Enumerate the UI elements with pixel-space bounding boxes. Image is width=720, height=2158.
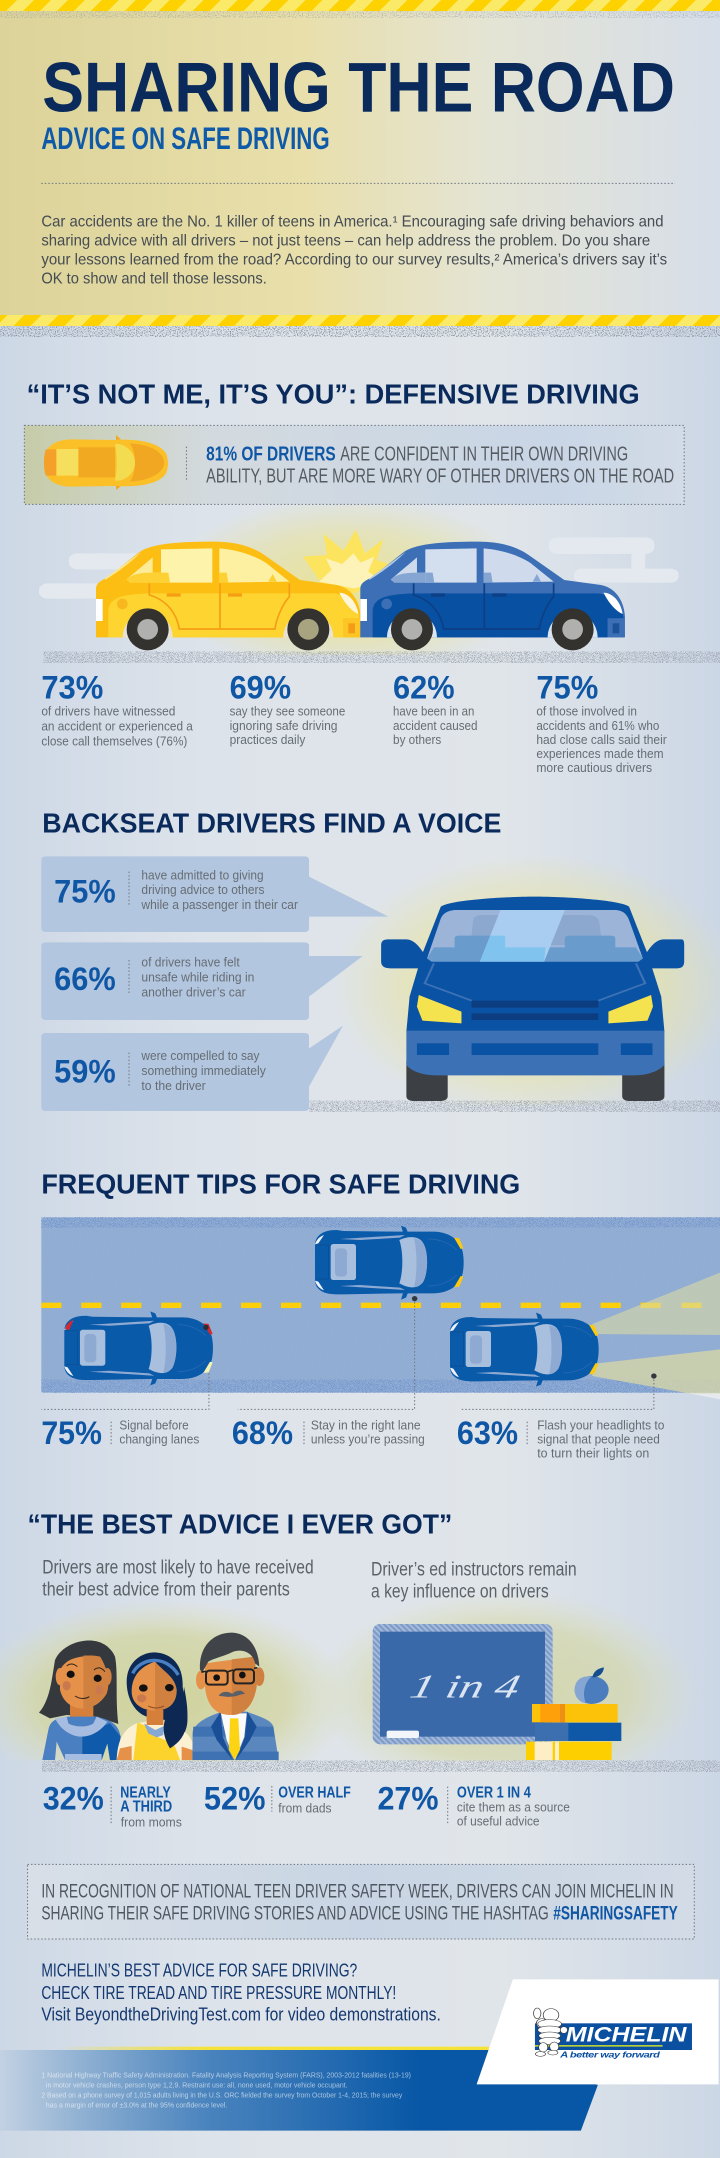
header text <box>41 48 675 287</box>
text: parents: their best advice from their parents <box>42 1578 290 1600</box>
ground speckle <box>310 1101 720 1112</box>
callout text: 81% OF DRIVERS <box>206 442 336 466</box>
footnotes: in motor vehicle crashes, person type 1,2,9. Restraint use: all, none used, motor vehicle occupant. <box>46 2081 348 2089</box>
callout text <box>206 442 674 488</box>
tip: 68%: Stay in the right lane <box>311 1418 421 1433</box>
tip: 68%: 68% <box>232 1415 293 1451</box>
speech bubble: 75%: 75% <box>54 873 116 910</box>
car: signalling <box>64 1311 213 1385</box>
stat: 73%: an accident or experienced a <box>41 719 193 734</box>
chalk text: 1 in 4 <box>406 1669 524 1705</box>
stat: 32%: from moms <box>121 1815 182 1830</box>
glow behind chalkboard <box>332 1598 681 1761</box>
Michelin advice text <box>41 1960 441 2025</box>
section: defensive driving <box>24 378 720 775</box>
chalkboard <box>373 1624 553 1744</box>
tip: 63%: 63% <box>457 1415 518 1451</box>
ground speckle <box>42 1761 720 1772</box>
footnotes <box>41 2071 411 2109</box>
top speckled edge <box>0 11 720 18</box>
header divider <box>41 182 675 184</box>
clouds <box>39 537 679 599</box>
speech bubble: 75%: driving advice to others <box>141 882 264 897</box>
stat: 32% <box>43 1780 182 1830</box>
stat: 69%: say they see someone <box>230 704 345 719</box>
speech bubble: 66%: 66% <box>54 961 116 997</box>
tip: 68%: unless you’re passing <box>311 1432 425 1447</box>
stat: 69% <box>230 669 345 747</box>
tip: 75%: 75% <box>41 1415 102 1451</box>
stat: 27%: cite them as a source <box>457 1800 570 1815</box>
stat: 32%: 32% <box>43 1780 104 1817</box>
speech bubble: 75%: while a passenger in their car <box>141 897 298 912</box>
mother <box>39 1640 121 1760</box>
books <box>526 1704 621 1760</box>
stat: 73%: 73% <box>41 669 103 706</box>
stat: 69%: ignoring safe driving <box>230 718 337 733</box>
illustration: family <box>39 1633 279 1760</box>
Michelin advice text: Visit BeyondtheDrivingTest.com for video demonstrations. <box>41 2004 441 2025</box>
stat: 32%: A THIRD <box>120 1798 172 1816</box>
subtitle: ADVICE ON SAFE DRIVING <box>41 122 330 156</box>
illustration: blue car front view <box>381 897 684 1101</box>
car: flashing headlights <box>450 1313 599 1387</box>
father <box>192 1633 279 1760</box>
bottom speckled edge <box>0 326 720 337</box>
heading: BACKSEAT DRIVERS FIND A VOICE <box>42 808 501 839</box>
tip: 63%: to turn their lights on <box>537 1446 649 1461</box>
stat: 52% <box>204 1780 351 1817</box>
section: best advice <box>0 1508 720 1830</box>
road <box>41 1217 720 1393</box>
tip: 75%: Signal before <box>119 1418 189 1433</box>
speech bubble: 59%: were compelled to say <box>141 1048 259 1063</box>
tip: 75% <box>41 1415 199 1451</box>
heading: “THE BEST ADVICE I EVER GOT” <box>28 1508 452 1540</box>
stat: 73% <box>41 669 193 749</box>
stat: 27%: of useful advice <box>457 1814 540 1829</box>
top hazard stripe <box>0 0 720 11</box>
tip: 68% <box>232 1415 425 1451</box>
speech bubble: 66%: of drivers have felt <box>141 955 240 970</box>
stat: 69%: practices daily <box>230 732 305 747</box>
daughter <box>117 1652 197 1760</box>
footnotes: 2 Based on a phone survey of 1,015 adults living in the U.S. ORC fielded the survey from October 1-4, 2015; the survey <box>41 2091 403 2099</box>
stat: 27%: 27% <box>377 1780 439 1817</box>
stat: 62% <box>393 669 478 747</box>
icon: yellow car top view <box>44 435 168 490</box>
logo panel <box>477 1979 719 2084</box>
stat: 73%: of drivers have witnessed <box>41 704 175 719</box>
header gradient panel <box>0 11 720 316</box>
icon: apple <box>575 1667 609 1704</box>
stat: 52%: from dads <box>278 1801 332 1816</box>
crash starburst <box>303 529 402 595</box>
stat: 75% <box>536 669 667 775</box>
speech bubble: 59% <box>41 1026 343 1111</box>
stat: 62%: have been in an <box>393 704 474 719</box>
stat: 75%: more cautious drivers <box>536 760 652 775</box>
stat: 62%: by others <box>393 732 441 747</box>
header banner <box>0 0 720 337</box>
stat: 27%: OVER 1 IN 4 <box>457 1784 531 1801</box>
headlight beams <box>592 1273 720 1399</box>
speech bubble: 75%: have admitted to giving <box>141 868 264 883</box>
stat: 75%: of those involved in <box>536 704 637 719</box>
section: closing <box>0 1864 719 2131</box>
stat: 73%: close call themselves (76%) <box>41 734 187 749</box>
chalkboard and books <box>373 1624 621 1760</box>
Michelin logo <box>534 2008 692 2060</box>
text: instructors: Driver’s ed instructors remain <box>371 1558 577 1580</box>
text: parents <box>42 1556 314 1600</box>
callout leader lines <box>41 1296 657 1409</box>
speech bubble: 75% <box>41 856 388 932</box>
stat: 52%: 52% <box>204 1780 265 1817</box>
crash glow <box>206 504 494 655</box>
tip: 63% <box>457 1415 664 1461</box>
Michelin logo: MICHELIN <box>566 2023 687 2047</box>
intro paragraph: OK to show and tell those lessons. <box>41 270 267 287</box>
stat: 69%: 69% <box>230 669 291 706</box>
stat: 52%: OVER HALF <box>278 1784 351 1801</box>
Michelin advice text: CHECK TIRE TREAD AND TIRE PRESSURE MONTHLY! <box>41 1982 396 2003</box>
stat: 27% <box>377 1780 570 1829</box>
yellow accent line <box>60 2047 489 2050</box>
speech bubble: 59%: to the driver <box>141 1078 206 1093</box>
Michelin man <box>534 2008 568 2056</box>
intro paragraph <box>41 213 667 287</box>
illustration: blue car <box>360 542 625 650</box>
stat: 62%: accident caused <box>393 718 478 733</box>
speech bubble: 66%: unsafe while riding in <box>141 970 254 985</box>
stat: 62%: 62% <box>393 669 455 706</box>
headlight glow <box>347 863 720 1105</box>
tip: 75%: changing lanes <box>119 1432 199 1447</box>
text: parents: Drivers are most likely to have received <box>42 1556 314 1577</box>
speech bubble: 66%: another driver’s car <box>141 985 246 1000</box>
bottom hazard stripe <box>0 315 720 326</box>
speech bubble: 66% <box>41 942 363 1020</box>
Michelin advice text: MICHELIN’S BEST ADVICE FOR SAFE DRIVING? <box>41 1960 357 1981</box>
car: top lane <box>315 1226 464 1300</box>
illustration: yellow car <box>96 542 361 650</box>
heading: FREQUENT TIPS FOR SAFE DRIVING <box>41 1168 520 1200</box>
lane dashes <box>41 1303 702 1308</box>
callout box <box>24 425 684 504</box>
glow behind family <box>0 1607 338 1761</box>
text: instructors: a key influence on drivers <box>371 1580 549 1601</box>
text: instructors <box>371 1558 577 1601</box>
ground speckle <box>44 652 720 663</box>
hashtag callout box <box>28 1864 694 1939</box>
footnotes: has a margin of error of ±3.0% at the 95% confidence level. <box>46 2101 227 2109</box>
footnotes: 1 National Highway Traffic Safety Administration. Fatality Analysis Reporting System (FARS), 2003-2012 fatalities (13-19) <box>41 2071 411 2079</box>
speech bubble: 59%: something immediately <box>141 1063 266 1078</box>
Michelin logo: A better way forward <box>559 2051 661 2060</box>
speech bubble: 59%: 59% <box>54 1053 116 1090</box>
stat: 75%: 75% <box>536 669 598 706</box>
stat: 32%: NEARLY <box>120 1784 171 1801</box>
section: frequent tips <box>41 1168 720 1461</box>
section: backseat drivers <box>41 808 720 1120</box>
blue footer band <box>0 2050 598 2131</box>
